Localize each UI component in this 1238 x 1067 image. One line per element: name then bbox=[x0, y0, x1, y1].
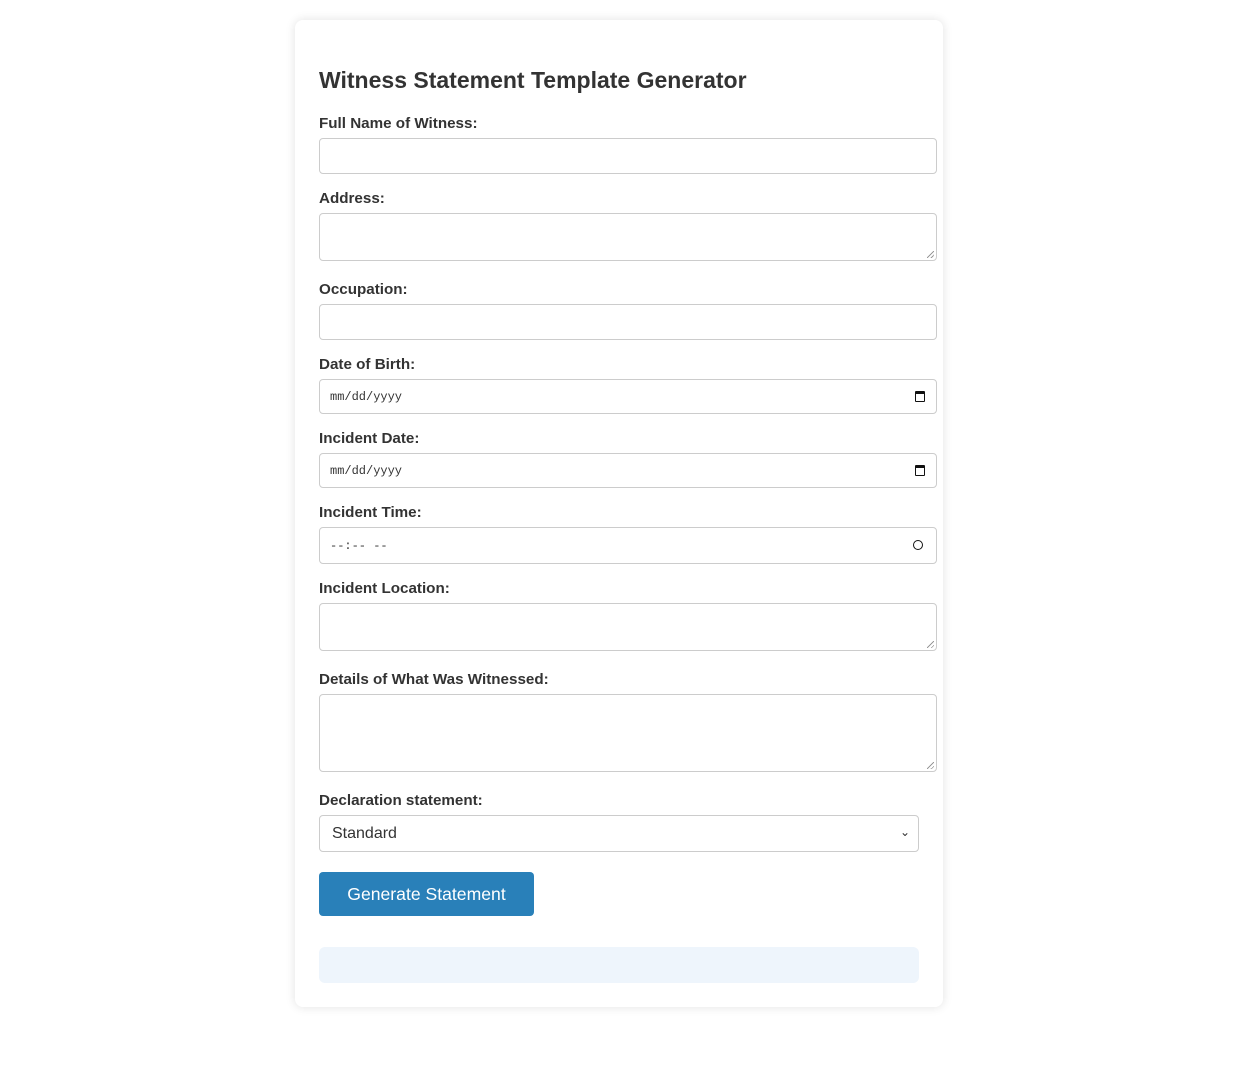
label: incident time: Incident Time: bbox=[319, 504, 422, 521]
input: occupation bbox=[319, 304, 937, 340]
input: incident time bbox=[319, 527, 937, 564]
button: generate statement: Generate Statement bbox=[347, 884, 506, 904]
select: declaration: Standard bbox=[332, 825, 397, 842]
input: incident time: --:-- -- bbox=[330, 539, 388, 553]
output box bbox=[319, 947, 919, 983]
input: date of birth bbox=[319, 379, 937, 414]
input: incident date bbox=[319, 453, 937, 488]
label: incident date: Incident Date: bbox=[319, 430, 419, 447]
select: declaration bbox=[319, 815, 919, 852]
label: date of birth: Date of Birth: bbox=[319, 356, 415, 373]
card panel bbox=[295, 20, 943, 1007]
button: generate statement bbox=[319, 872, 534, 916]
label: occupation: Occupation: bbox=[319, 281, 408, 298]
label: details: Details of What Was Witnessed: bbox=[319, 671, 549, 688]
input: incident date: mm/dd/yyyy bbox=[330, 464, 402, 478]
select: declaration: ⌄ bbox=[900, 825, 910, 839]
textarea: address bbox=[319, 213, 937, 261]
textarea: details bbox=[319, 694, 937, 772]
label: full name: Full Name of Witness: bbox=[319, 115, 478, 132]
title: Witness Statement Template Generator bbox=[319, 67, 747, 93]
label: declaration: Declaration statement: bbox=[319, 792, 483, 809]
textarea: incident location bbox=[319, 603, 937, 651]
input: full name bbox=[319, 138, 937, 174]
label: incident location: Incident Location: bbox=[319, 580, 450, 597]
input: date of birth: mm/dd/yyyy bbox=[330, 390, 402, 404]
label: address: Address: bbox=[319, 190, 385, 207]
